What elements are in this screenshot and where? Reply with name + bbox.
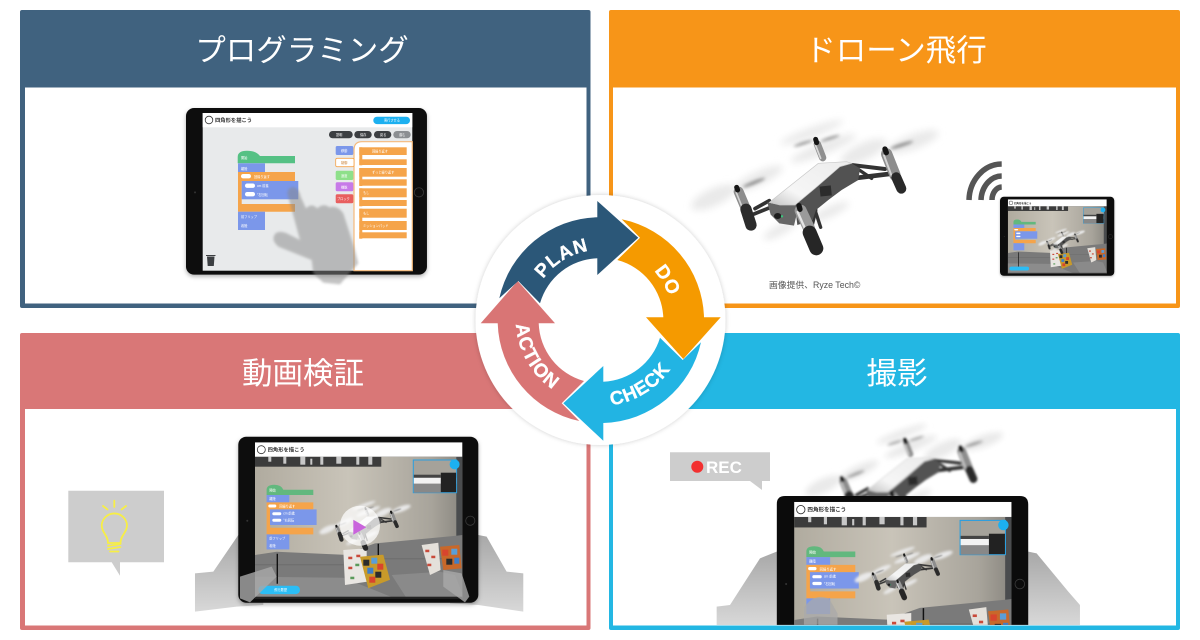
- tablet: block editor: 着陸: [241, 223, 248, 228]
- arrow: ACTION: ACTION: [516, 324, 560, 389]
- icon: wifi: [969, 164, 1002, 200]
- tablet: block editor: 回繰り返す: [254, 174, 270, 179]
- tablet: video playback: 離陸: [269, 496, 276, 501]
- tablet: block editor: °右回転: [257, 192, 269, 197]
- tablet: video playback: 回繰り返す: [279, 504, 295, 509]
- callout: REC: [670, 452, 770, 490]
- tablet: block editor: ミッションパッド: [363, 223, 388, 228]
- tablet: block editor: 回繰り返す: [372, 148, 388, 154]
- tablet: flight view: [1000, 197, 1114, 276]
- heading: video review: 動画検証: [242, 357, 364, 391]
- tablet: recording view: 離陸: [809, 559, 817, 564]
- tablet: block editor: 保存: [360, 132, 367, 137]
- tablet: block editor: 開始: [241, 155, 248, 160]
- panel: programming: [20, 10, 590, 308]
- tablet: video playback: [238, 437, 478, 603]
- tablet: block editor: 進む: [399, 132, 405, 137]
- tablet: block editor: 離陸: [241, 166, 248, 171]
- tablet: block editor: cm 前進: [257, 183, 269, 188]
- tablet: block editor: ブロック: [337, 196, 350, 201]
- tablet: recording view: °右回転: [824, 581, 836, 586]
- tablet: block editor: 説明: [336, 132, 342, 137]
- replay button: [258, 586, 300, 594]
- panel: video review: [20, 333, 590, 630]
- arrow: PLAN: [499, 201, 638, 304]
- icon: trash can: [206, 255, 216, 266]
- tablet: block editor: 前フリップ: [241, 214, 258, 219]
- thumbs: [240, 567, 469, 602]
- tablet: block editor: 機能: [341, 184, 348, 190]
- arrow: DO: [617, 219, 721, 359]
- tablet: video playback: °右回転: [283, 518, 295, 523]
- icon: play button: [340, 506, 380, 546]
- tablet: block editor: ずっと繰り返す: [372, 170, 394, 174]
- heading: recording: 撮影: [866, 357, 928, 391]
- tablet: recording view: cm 前進: [824, 574, 837, 579]
- tablet: recording view: 開始: [809, 550, 817, 555]
- tablet: block editor: 戻る: [380, 132, 386, 137]
- panel: drone flight: [609, 10, 1180, 308]
- caption: image credit: 画像提供、Ryze Tech©: [769, 279, 861, 290]
- arrow: PLAN: PLAN: [534, 238, 587, 278]
- callout: REC: REC: [706, 458, 742, 477]
- tablet: block editor: 移動: [341, 148, 347, 153]
- arrow: CHECK: CHECK: [610, 362, 671, 404]
- drone photo: [688, 117, 941, 248]
- hands holding tablet: [195, 535, 523, 612]
- heading: programming: プログラミング: [195, 34, 409, 68]
- tablet: block editor: もし: [363, 210, 369, 216]
- arrow: DO: DO: [654, 264, 680, 294]
- tablet: block editor: 速度: [341, 173, 348, 178]
- arrow: CHECK: [563, 338, 701, 441]
- tablet: block editor: もし: [363, 190, 369, 195]
- tablet: video playback: 四角形を描こう: [268, 446, 305, 454]
- tablet: block editor: 四角形を描こう: [215, 116, 252, 124]
- replay button: 飛行履歴: [274, 587, 288, 592]
- tablet: block editor: 実行させる: [384, 118, 400, 123]
- tablet: block editor: 制御: [341, 160, 347, 165]
- tablet: video playback: cm 前進: [283, 511, 296, 516]
- tablet: flight view: 四角形を描こう: [1014, 201, 1032, 205]
- tablet: video playback: 前フリップ: [269, 536, 286, 541]
- heading: drone flight: ドローン飛行: [805, 34, 987, 68]
- tablet: recording view: [776, 496, 1028, 625]
- icon: pointing hand: [273, 187, 358, 284]
- tablet: video playback: 着陸: [269, 543, 276, 548]
- tablet: video playback: 開始: [269, 488, 276, 493]
- hands: [717, 552, 1080, 625]
- tablet: block editor: [186, 108, 427, 275]
- tablet: recording view: 四角形を描こう: [807, 506, 846, 514]
- white disc: [476, 195, 726, 445]
- arrow: ACTION: [480, 281, 584, 421]
- PDCA cycle: [474, 193, 728, 447]
- callout: idea: [68, 491, 164, 576]
- icon: light bulb: [102, 501, 127, 552]
- tablet: recording view: 回繰り返す: [820, 566, 837, 571]
- blurred flying drone: [803, 421, 1005, 527]
- panel: recording: [609, 333, 1180, 640]
